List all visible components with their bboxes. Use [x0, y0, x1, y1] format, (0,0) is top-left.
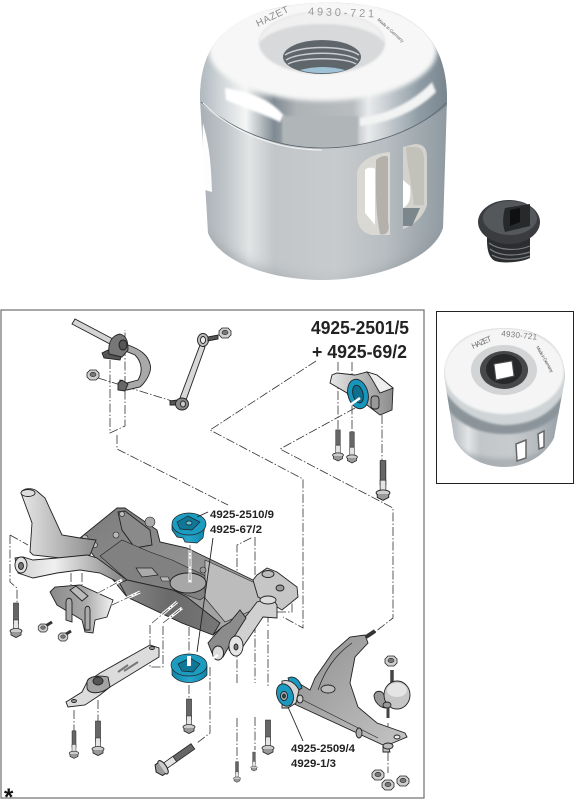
photo: HAZET 4930-721 adapter sleeve: Made in Germany — [376, 17, 406, 44]
bolts and nuts — [10, 430, 409, 790]
part number 4925-2501/5 + 4925-69/2: 4925-2501/5 — [311, 318, 409, 338]
subframe — [15, 489, 298, 660]
left arm — [15, 555, 127, 583]
right bracket — [253, 568, 298, 610]
small nuts — [87, 328, 231, 380]
panel: inset photo frame: 4930-721 — [501, 329, 538, 342]
engraved text: HAZET — [254, 4, 291, 30]
photo: HAZET 4930-721 adapter sleeve: 4930-721 — [308, 6, 374, 20]
photo: HAZET 4930-721 adapter sleeve — [195, 0, 450, 285]
part number 4925-2509/4 and 4929-1/3: 4929-1/3 — [291, 758, 336, 770]
part number 4925-2501/5 + 4925-69/2: + 4925-69/2 — [312, 342, 407, 362]
left cover bracket — [50, 585, 113, 633]
stabilizer link — [170, 334, 218, 410]
control arm bracket with blue bushing — [330, 372, 393, 415]
part number 4925-2501/5 + 4925-69/2 — [311, 318, 409, 362]
panel: inset photo frame: HAZET — [470, 334, 493, 351]
part number 4925-2510/9 and 4925-67/2 — [210, 509, 274, 536]
part number 4925-2509/4 and 4929-1/3: 4925-2509/4 — [291, 743, 356, 755]
part number 4925-2510/9 and 4925-67/2: 4925-67/2 — [210, 524, 262, 536]
leader lines — [197, 512, 303, 741]
panel: exploded diagram frame — [1, 310, 424, 798]
white guide bars — [98, 545, 190, 623]
panel: inset photo frame: Made in Germany — [535, 345, 555, 374]
part number 4925-2510/9 and 4925-67/2: 4925-2510/9 — [210, 509, 274, 521]
seam line — [201, 102, 446, 148]
blue bushing upper 4925-2510/9 — [172, 513, 206, 543]
side windows — [357, 152, 390, 235]
part number 4925-2509/4 and 4929-1/3 — [291, 743, 356, 770]
left tower — [21, 489, 96, 558]
lower control arm with blue bushing — [274, 631, 407, 752]
torque support arm — [66, 645, 159, 707]
panel: inset photo frame — [436, 312, 574, 484]
photo: black threaded plug — [478, 200, 540, 262]
stabilizer bar with clamp — [72, 319, 151, 391]
dash-dot assembly lines — [10, 330, 393, 773]
blue bushing lower 4925-67/2 — [171, 654, 207, 682]
ball joint — [374, 656, 410, 718]
